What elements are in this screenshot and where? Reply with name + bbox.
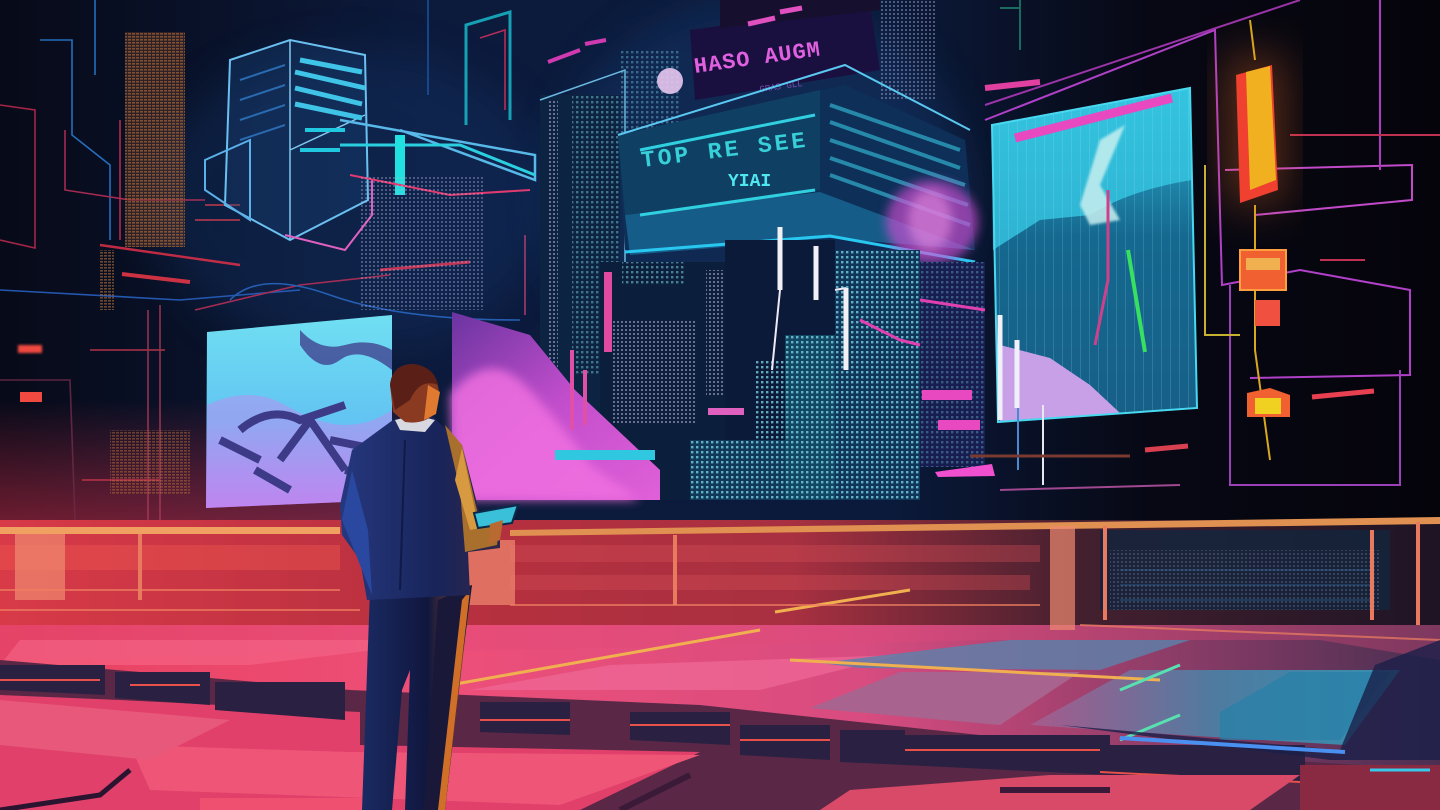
top sign — [548, 0, 935, 100]
circuit lines: right wall — [970, 0, 1440, 490]
jacket — [340, 416, 500, 600]
top sign: GRAS GLL — [759, 79, 803, 95]
neon orange blocks — [1225, 55, 1290, 417]
panel: cyan cloud screen — [206, 315, 392, 508]
head — [390, 364, 439, 423]
lower city blocks — [600, 227, 995, 500]
data columns left of centre — [360, 50, 680, 435]
central holographic building: TOP RE SEE — [640, 128, 810, 174]
top sign: HASO AUGM — [692, 37, 823, 80]
man with tablet — [340, 364, 518, 810]
tall orange tower left — [18, 32, 190, 495]
panel: right cyan screen — [992, 88, 1197, 485]
legs — [362, 585, 472, 810]
tablet — [474, 505, 518, 528]
floor tile rows — [0, 640, 1440, 810]
panel: magenta screen — [450, 312, 660, 500]
floor — [0, 520, 1440, 810]
railing — [0, 517, 1440, 640]
central holographic building — [618, 65, 978, 264]
circuit lines: left wall — [0, 0, 525, 560]
holographic cube structure — [205, 40, 535, 250]
central holographic building: YIAI — [728, 172, 771, 192]
